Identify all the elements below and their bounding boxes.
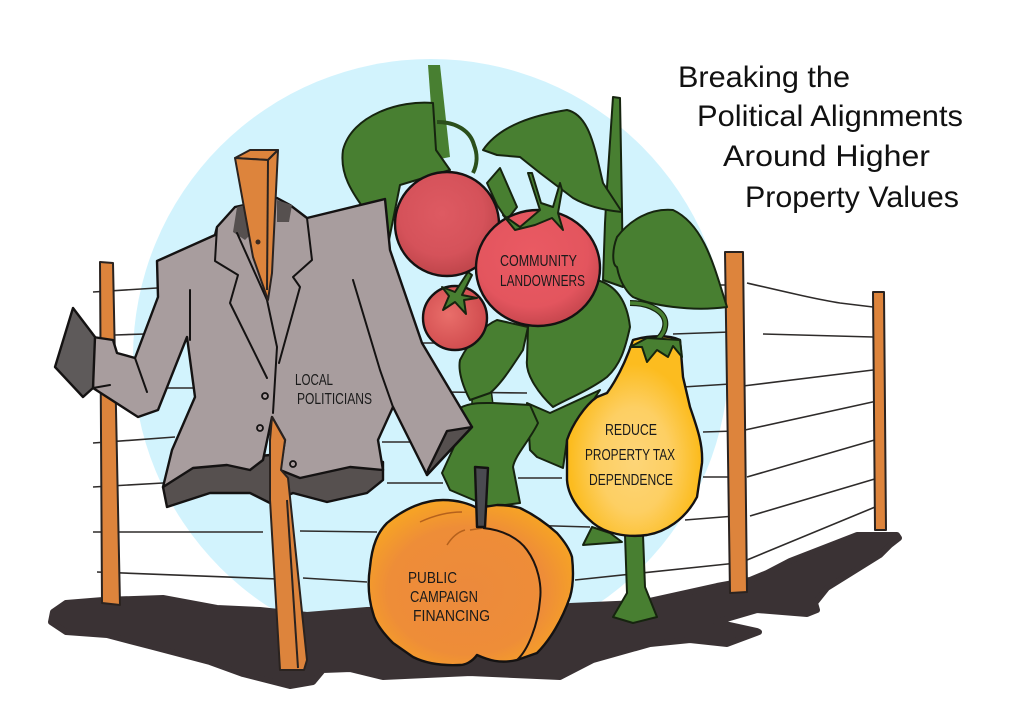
leaf: lower right xyxy=(527,390,600,468)
leaf: right xyxy=(613,210,727,309)
jacket label: LOCAL xyxy=(295,372,333,389)
plant stems xyxy=(428,65,657,623)
yellow squash: DEPENDENCE xyxy=(589,472,673,489)
squash label: REDUCE xyxy=(605,422,657,439)
title: Breaking the xyxy=(678,61,850,94)
jacket xyxy=(55,198,472,507)
yellow squash: PROPERTY TAX xyxy=(585,447,675,464)
leaves xyxy=(342,103,727,545)
leaf: upper right xyxy=(483,110,622,212)
yellow squash xyxy=(567,303,702,536)
leaf: inner stem patch xyxy=(487,168,517,220)
scarecrow post bottom xyxy=(270,417,307,670)
jacket buttons xyxy=(262,393,268,399)
jacket lapels and seams xyxy=(93,218,393,413)
vine: upper left curl xyxy=(437,122,477,173)
jacket: POLITICIANS xyxy=(297,391,372,408)
big tomato: LANDOWNERS xyxy=(500,273,585,290)
leaf: middle xyxy=(527,280,630,407)
pumpkin: FINANCING xyxy=(413,608,490,625)
jacket right cuff xyxy=(427,427,472,475)
pumpkin xyxy=(369,467,573,665)
title xyxy=(678,61,963,214)
leaf: left xyxy=(459,320,528,400)
background circle xyxy=(133,59,729,655)
fence post right xyxy=(725,252,747,593)
jacket inner collar xyxy=(233,200,292,240)
jacket body xyxy=(93,198,472,487)
jacket dark lining xyxy=(163,455,383,507)
fence wires xyxy=(93,283,880,582)
pumpkin: CAMPAIGN xyxy=(410,589,478,606)
tomato label: COMMUNITY xyxy=(500,253,577,270)
title: Property Values xyxy=(745,181,959,214)
leaf: small under squash xyxy=(583,527,622,545)
ground shadow xyxy=(51,535,899,686)
title: Around Higher xyxy=(723,140,930,173)
jacket left cuff xyxy=(55,308,95,397)
top tomato xyxy=(395,172,499,276)
scarecrow post top xyxy=(235,150,278,300)
pumpkin label: PUBLIC xyxy=(408,570,457,587)
big tomato xyxy=(476,173,600,326)
leaf: upper left xyxy=(342,103,450,245)
fence post far right xyxy=(873,292,886,530)
small tomato xyxy=(423,272,487,350)
leaf: lower xyxy=(442,403,538,507)
title: Political Alignments xyxy=(697,100,963,133)
fence post left xyxy=(100,262,120,605)
